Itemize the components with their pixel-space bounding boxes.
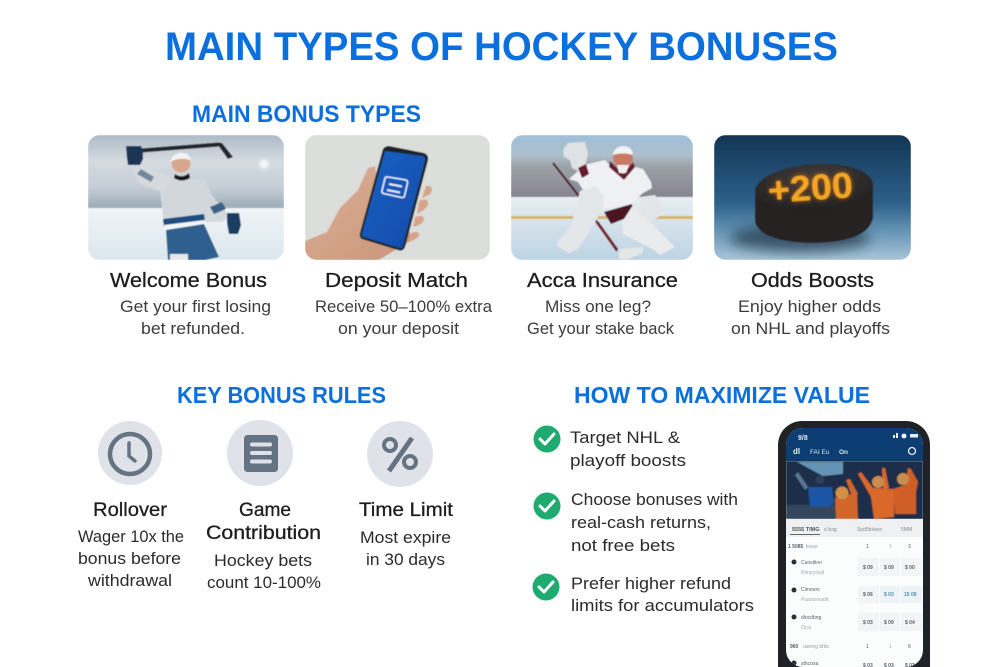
app odds rows: 1 [866, 644, 869, 650]
app odds rows: Rimpysjod [801, 570, 825, 576]
heading: rollover: Rollover [93, 500, 168, 521]
app odds rows: $ 06 [863, 592, 873, 598]
image: glowing puck [714, 135, 911, 260]
icon: check [534, 492, 560, 520]
phone mockup: dl [793, 447, 800, 456]
phone mockup: s'/ssg [824, 527, 837, 533]
app odds rows: 15 09 [904, 592, 917, 598]
phone mockup: On [839, 449, 848, 456]
tip text: not free bets [571, 536, 675, 555]
app odds rows: 1 [889, 544, 892, 550]
phone mockup [778, 421, 930, 667]
title: MAIN TYPES OF HOCKEY BONUSES [165, 25, 838, 69]
tip text: Target NHL & [570, 428, 681, 447]
heading: acca insurance: Acca Insurance [527, 270, 678, 292]
description: acca insurance: Miss one leg? [545, 297, 651, 316]
app odds rows: $ 03 [863, 620, 873, 626]
app odds rows: 960 [790, 644, 799, 650]
panel: deposit match: on your deposit [338, 319, 459, 338]
heading: welcome bonus: Welcome Bonus [110, 270, 267, 292]
app odds rows: 1 5085 [788, 544, 804, 550]
heading: odds boosts: Odds Boosts [751, 270, 874, 292]
app odds rows: $ 09 [863, 565, 873, 571]
tip text: limits for accumulators [571, 596, 754, 615]
app odds rows: 8 [908, 644, 911, 650]
icon: percent [367, 421, 433, 487]
app odds rows: Cimnors [801, 587, 820, 593]
description: odds boosts: Enjoy higher odds [738, 297, 881, 316]
rule: rollover [78, 421, 184, 590]
app odds rows: Puaossnaolt [801, 597, 829, 603]
image: hand holding phone [305, 135, 490, 260]
heading: how to maximize value: HOW TO MAXIMIZE VALUE [574, 382, 870, 408]
tip text [571, 574, 754, 615]
rule: game contribution: Contribution [206, 523, 321, 544]
tip: refund limits [532, 574, 754, 615]
app odds rows: 3 [908, 544, 911, 550]
heading: key bonus rules: KEY BONUS RULES [177, 382, 386, 408]
app odds rows: dlocdbng [801, 615, 822, 621]
panel: welcome bonus: bet refunded. [141, 319, 245, 338]
panel: odds boosts: on NHL and playoffs [731, 319, 890, 338]
app odds rows: sthcoxa [801, 661, 818, 667]
tip text: Choose bonuses with [571, 490, 738, 509]
rule: rollover: bonus before [78, 549, 181, 568]
heading: game contribution: Game [239, 500, 291, 521]
app odds rows: 1 [866, 544, 869, 550]
phone mockup: FAI Eu [810, 449, 830, 456]
panel: deposit match [305, 135, 493, 338]
panel: acca insurance [511, 135, 693, 338]
rule: time limit [359, 421, 454, 569]
app odds rows: 1 [889, 644, 892, 650]
description: game contribution: Hockey bets [214, 551, 312, 570]
app status bar: 9/8 [798, 435, 808, 442]
app odds rows [788, 544, 922, 667]
app odds rows: $ 04 [905, 620, 915, 626]
heading: time limit: Time Limit [359, 500, 454, 521]
heading: main bonus types: MAIN BONUS TYPES [192, 101, 421, 128]
tip: target NHL [534, 426, 686, 470]
glow behind +200: +200 [767, 164, 854, 211]
panel: odds boosts [714, 135, 911, 338]
phone mockup: 5MM [901, 527, 912, 533]
app odds rows: Ocsi [801, 625, 811, 631]
app odds rows: $ 03 [884, 592, 894, 598]
phone mockup: Spd5tolace [857, 527, 882, 533]
panel: welcome bonus [88, 135, 284, 338]
image: hockey player celebrating [88, 135, 284, 260]
description: welcome bonus: Get your first losing [120, 297, 271, 316]
icon: check [532, 574, 560, 600]
rule: game contribution [206, 420, 321, 592]
icon: document [227, 420, 293, 486]
app odds rows: Cuosition [801, 560, 822, 566]
icon: check [534, 426, 560, 452]
tip text: real-cash returns, [571, 513, 711, 532]
app tabs [786, 519, 923, 537]
tip text [571, 490, 738, 555]
tip text: Prefer higher refund [571, 574, 731, 593]
rule: game contribution: count 10-100% [207, 573, 321, 592]
description: rollover: Wager 10x the [78, 527, 184, 546]
app odds rows: $ 00 [905, 565, 915, 571]
rule: time limit: in 30 days [366, 550, 445, 569]
app odds rows: $ 09 [884, 565, 894, 571]
tip text: playoff boosts [570, 451, 686, 470]
app odds rows: losse [806, 544, 818, 550]
app hero: fans in orange [786, 461, 923, 519]
tip text [570, 428, 686, 470]
tip: choose bonuses [534, 490, 738, 555]
description: deposit match: Receive 50–100% extra [315, 297, 493, 316]
heading: deposit match: Deposit Match [325, 270, 468, 292]
text: +200: +200 [767, 164, 854, 211]
image: goalie on ice [511, 135, 693, 260]
description: time limit: Most expire [360, 528, 451, 547]
phone mockup: 5555 TIMG [792, 527, 820, 533]
app odds rows: $ 09 [884, 620, 894, 626]
rule: rollover: withdrawal [87, 571, 172, 590]
icon: clock [98, 421, 162, 485]
panel: acca insurance: Get your stake back [527, 319, 674, 338]
app odds rows: uaning bfds [803, 644, 829, 650]
